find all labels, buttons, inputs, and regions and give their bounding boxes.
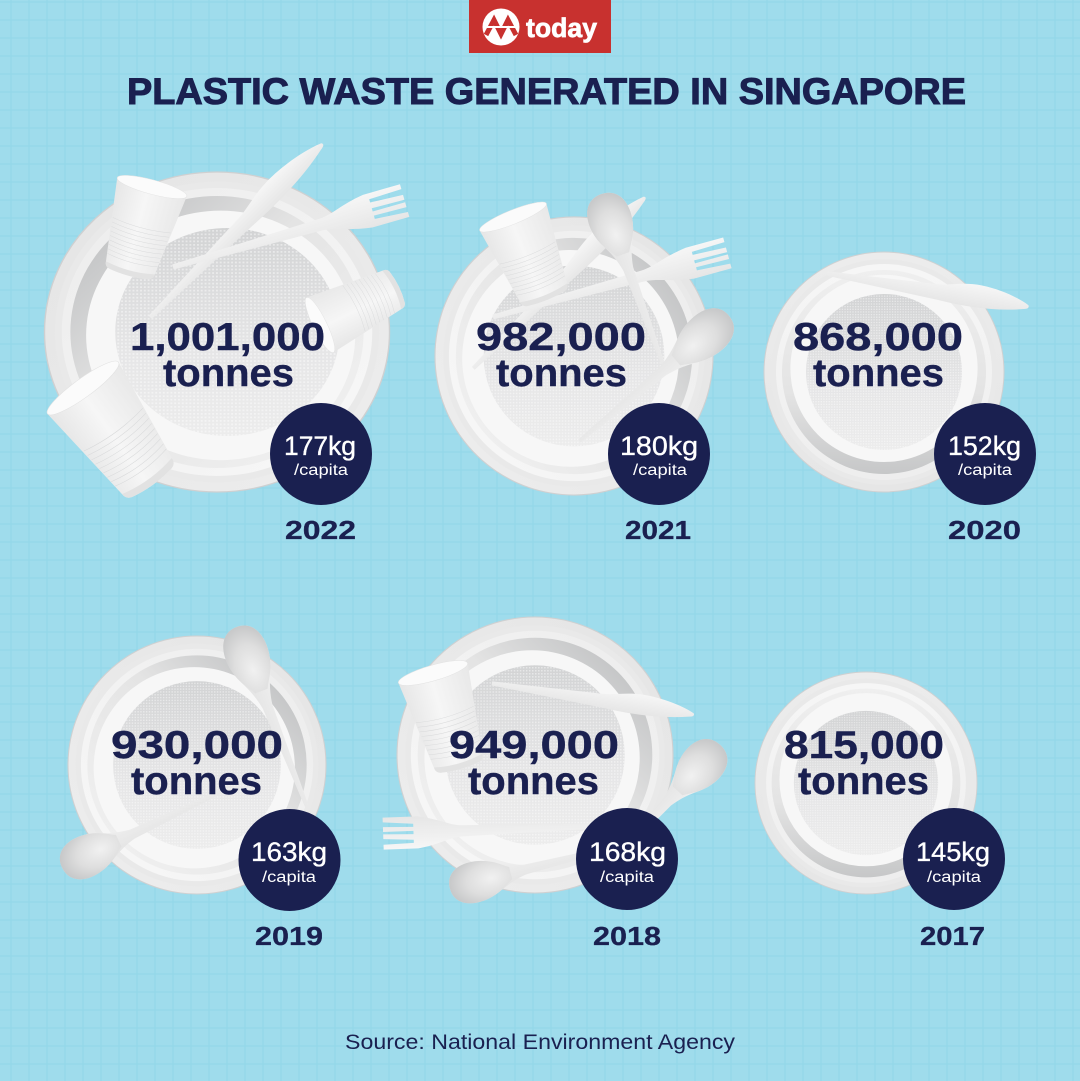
year 2020: 2020 <box>948 515 1021 545</box>
value 2022: 1,001,000 <box>130 316 325 359</box>
knife 2022 <box>141 135 329 323</box>
panel: 2017 <box>755 672 1005 951</box>
plate 2021 <box>380 162 768 550</box>
knife 2018 <box>491 671 696 723</box>
unit 2018: tonnes <box>468 760 599 803</box>
year 2021: 2021 <box>625 515 691 545</box>
spoon 2019 lower <box>53 772 231 887</box>
spoon 2021 lower <box>565 299 743 458</box>
title: PLASTIC WASTE GENERATED IN SINGAPORE <box>127 71 966 112</box>
logo: today: today <box>526 13 597 43</box>
panel: 2022 <box>0 106 461 558</box>
badge 2022 <box>270 403 372 505</box>
fork 2021 <box>489 237 732 332</box>
value 2019: 930,000 <box>111 724 283 767</box>
value 2017: 815,000 <box>784 724 944 767</box>
value 2020: 868,000 <box>793 316 963 359</box>
plate 2018 <box>340 560 730 950</box>
cup 2022 bottom <box>42 355 189 510</box>
logo: today <box>469 0 611 53</box>
badge 2018: /capita <box>600 869 654 886</box>
value 2021: 982,000 <box>476 316 646 359</box>
unit 2020: tonnes <box>813 352 944 395</box>
value 2018: 949,000 <box>449 724 619 767</box>
plate 2019 <box>15 583 379 947</box>
cup 2022 right <box>300 259 412 356</box>
year 2019: 2019 <box>255 921 323 951</box>
panel: 2021 <box>380 162 768 550</box>
unit 2021: tonnes <box>496 352 627 395</box>
spoon 2019 top <box>216 619 327 815</box>
badge 2021 <box>608 403 710 505</box>
badge 2017: 145kg <box>916 837 990 867</box>
unit 2017: tonnes <box>798 760 929 803</box>
badge 2020 <box>934 403 1036 505</box>
badge 2019: 163kg <box>251 837 327 867</box>
cup 2018 <box>396 656 495 779</box>
spoon 2021 top <box>581 187 683 371</box>
badge 2019 <box>238 809 340 911</box>
panel: 2019 <box>15 583 379 951</box>
knife 2021 <box>465 189 651 374</box>
cup 2021 <box>477 197 580 314</box>
badge 2017: /capita <box>927 869 981 886</box>
badge 2017 <box>903 808 1005 910</box>
badge 2019: /capita <box>262 869 316 886</box>
plate 2022 <box>0 106 461 558</box>
fork 2022 <box>168 184 409 283</box>
badge 2018: 168kg <box>589 837 666 867</box>
badge 2018 <box>576 808 678 910</box>
panel: 2018 <box>340 560 736 951</box>
plate 2017 <box>755 672 977 894</box>
knife 2020 <box>825 260 1031 316</box>
source: Source: National Environment Agency <box>345 1031 736 1054</box>
fork 2018 <box>383 810 601 850</box>
year 2022: 2022 <box>285 515 356 545</box>
unit 2022: tonnes <box>163 352 294 395</box>
year 2018: 2018 <box>593 921 661 951</box>
panel: 2020 <box>764 252 1036 545</box>
cup 2022 top <box>93 171 189 285</box>
badge 2022: /capita <box>294 462 348 479</box>
spoon 2018 lower <box>445 826 626 908</box>
badge 2021: /capita <box>633 462 687 479</box>
badge 2020: 152kg <box>948 431 1021 461</box>
spoon 2018 right <box>584 730 736 889</box>
badge 2021: 180kg <box>620 431 698 461</box>
badge 2022: 177kg <box>284 431 356 461</box>
badge 2020: /capita <box>958 462 1012 479</box>
year 2017: 2017 <box>920 921 985 951</box>
plate 2020 <box>764 252 1004 492</box>
unit 2019: tonnes <box>131 760 262 803</box>
